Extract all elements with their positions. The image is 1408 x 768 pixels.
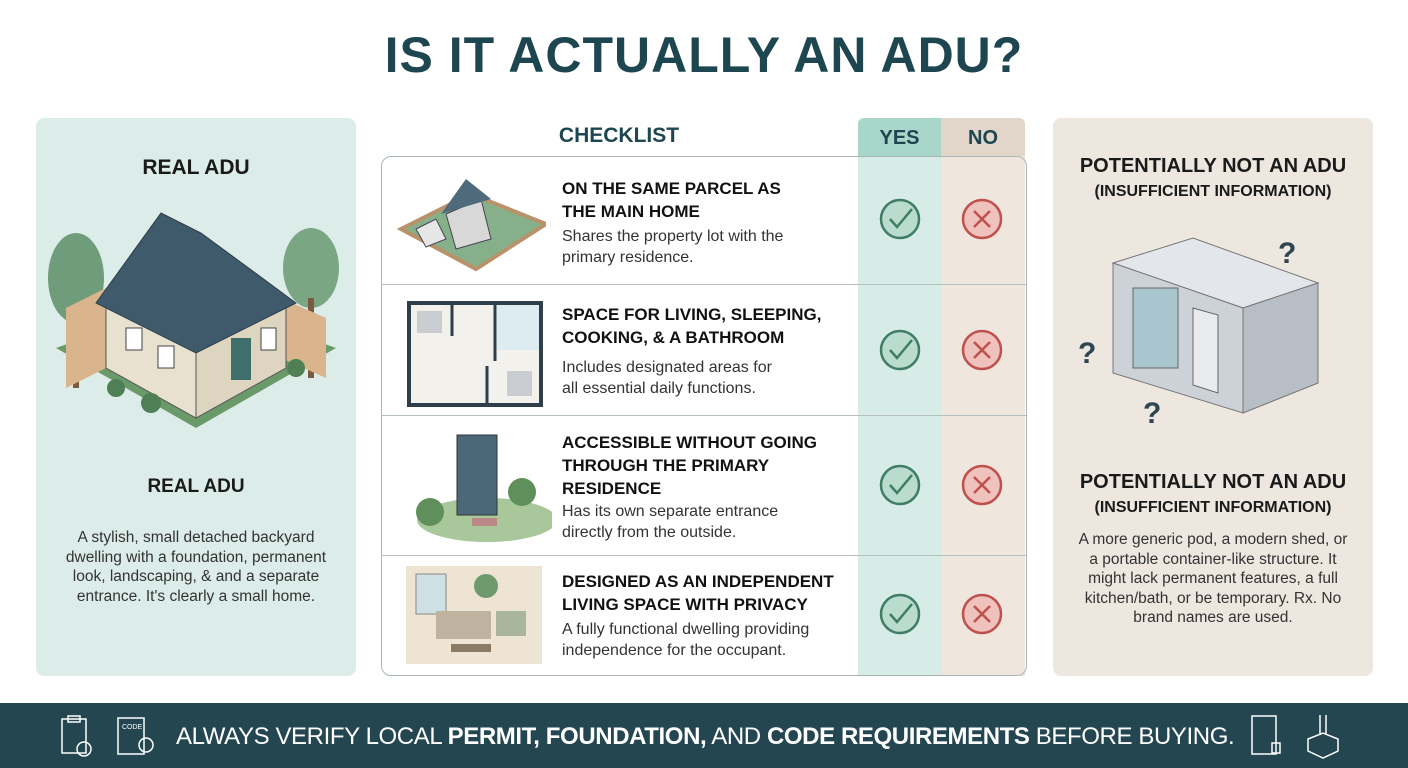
text: row 4: [562, 572, 834, 614]
heading: (INSUFFICIENT INFORMATION): [1094, 183, 1332, 200]
panel: potentially not an ADU: [1053, 118, 1373, 676]
heading: POTENTIALLY NOT AN ADU: [1080, 155, 1346, 177]
heading: description: [1080, 471, 1346, 516]
icon: floor plan: [407, 301, 543, 407]
heading: description: (INSUFFICIENT INFORMATION): [1094, 499, 1332, 516]
row 4: A fully functional dwelling providing: [562, 621, 809, 638]
checklist header: CHECKLIST: [559, 124, 679, 147]
text: real ADU description: A stylish, small detached backyard dwelling with a foundation, permanent look, landscaping, & and a separate entrance. It's clearly a small home.: [66, 529, 326, 604]
text: row 1: ON THE SAME PARCEL AS: [562, 179, 781, 198]
heading: real ADU: REAL ADU: [142, 156, 250, 179]
checklist table: [381, 156, 1027, 676]
row 2: all essential daily functions.: [562, 380, 756, 397]
row 3: Has its own separate entrance: [562, 503, 778, 520]
text: row 3: [562, 433, 817, 498]
footer banner: [0, 703, 1408, 768]
illustration: small house: [48, 212, 339, 428]
text: row 2: SPACE FOR LIVING, SLEEPING,: [562, 305, 821, 324]
row 3: directly from the outside.: [562, 524, 736, 541]
text: row 1: THE MAIN HOME: [562, 202, 700, 221]
row 1: [382, 157, 1026, 285]
heading: [1080, 155, 1346, 200]
text: row 3: THROUGH THE PRIMARY: [562, 456, 769, 475]
icon: door: [416, 434, 552, 542]
text: description: A more generic pod, a modern shed, or a portable container-like structure. It might lack permanent features, a full kitchen/bath, or be temporary. Rx. No brand names are used.: [1079, 531, 1347, 626]
icons: report and foundation: [1251, 715, 1339, 759]
panel: real ADU: [36, 118, 356, 676]
text: row 4: LIVING SPACE WITH PRIVACY: [562, 595, 808, 614]
heading: real ADU description: REAL ADU: [147, 476, 245, 497]
text: row 4: DESIGNED AS AN INDEPENDENT: [562, 572, 834, 591]
row 2: Includes designated areas for: [562, 359, 772, 376]
illustration: container pod: [1078, 237, 1320, 423]
icons: clipboard and code doc: CODE: [122, 724, 143, 731]
column: no: NO: [968, 127, 998, 149]
illustration: container pod: ?: [1078, 337, 1096, 370]
column: yes: YES: [879, 127, 920, 149]
row 1: primary residence.: [562, 249, 694, 266]
text: footer message: ALWAYS VERIFY LOCAL PERMIT, FOUNDATION, AND CODE REQUIREMENTS BEFORE BUYING.: [176, 723, 1234, 750]
heading: description: POTENTIALLY NOT AN ADU: [1080, 471, 1346, 493]
row 2: [382, 285, 1026, 416]
text: row 2: [562, 305, 821, 347]
text: row 1: [562, 179, 781, 221]
column: no: [941, 118, 1025, 676]
icons: clipboard and code doc: [61, 715, 154, 757]
icon: living room: [406, 566, 542, 664]
row 3: [382, 416, 1026, 556]
text: row 3: ACCESSIBLE WITHOUT GOING: [562, 433, 817, 452]
row 4: independence for the occupant.: [562, 642, 786, 659]
row 1: Shares the property lot with the: [562, 228, 783, 245]
title: IS IT ACTUALLY AN ADU?: [385, 27, 1023, 83]
text: row 3: RESIDENCE: [562, 479, 661, 498]
illustration: container pod: ?: [1278, 237, 1296, 270]
column: yes: [858, 118, 941, 676]
text: row 2: COOKING, & A BATHROOM: [562, 328, 784, 347]
icon: parcel: [396, 179, 546, 272]
row 4: [406, 566, 834, 664]
